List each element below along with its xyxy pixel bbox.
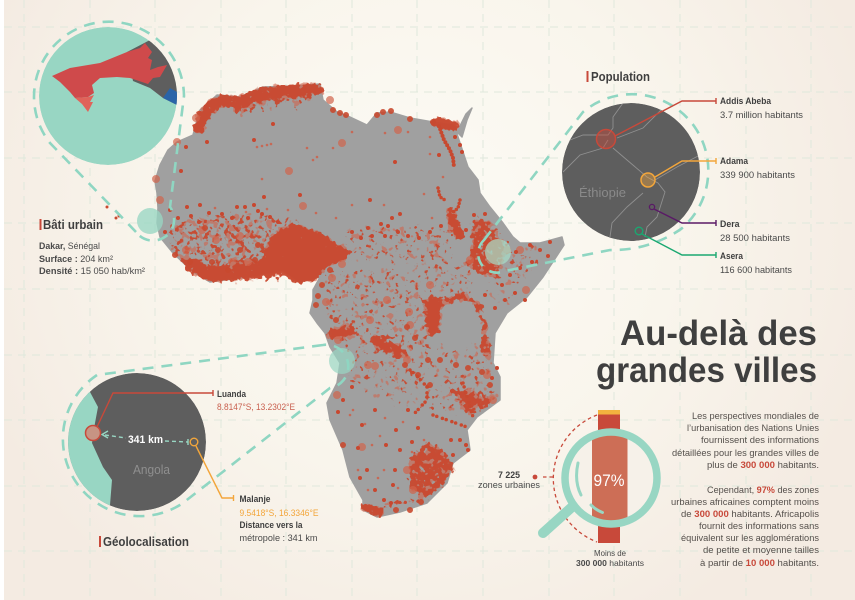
text block: description: fournit des informations sans	[699, 521, 819, 532]
text: Dakar facts	[39, 241, 145, 277]
medium dots	[165, 124, 550, 503]
distance arrow	[102, 431, 188, 446]
panel: Bâti urbain	[34, 22, 184, 277]
text: Dakar facts: Densité : 15 050 hab/km²	[39, 266, 145, 277]
pale urban dot field	[165, 89, 550, 513]
dashed callout ring	[478, 94, 708, 273]
map of Africa	[107, 84, 564, 517]
callout: Adama: Adama	[720, 156, 749, 167]
small dots	[215, 132, 443, 490]
label: 7 225 zones urbaines: 7 225	[498, 470, 521, 481]
callout: Malanje: Distance vers la	[240, 520, 303, 531]
magnifier handle	[543, 507, 572, 533]
panel: Population	[478, 69, 803, 276]
label: 7 225 zones urbaines	[478, 470, 540, 491]
magnifier lens interior	[570, 436, 652, 520]
callout: Dera: Dera	[720, 219, 740, 230]
title	[596, 314, 817, 390]
label: Éthiopie: Éthiopie	[579, 185, 626, 200]
text block: description: fournissent des informations	[701, 435, 819, 446]
dense urban dot field	[165, 89, 550, 513]
locator lens: Dakar	[137, 208, 163, 234]
dashed bracket: 7 225 zones	[541, 415, 597, 542]
text: Dakar facts: Surface : 204 km²	[39, 254, 113, 265]
heading: Population: Population	[591, 69, 650, 84]
label: moins de 300 000 habitants	[576, 548, 644, 568]
magnifier glints	[577, 463, 602, 512]
magnifier ring	[565, 432, 657, 524]
text block: description: Les perspectives mondiales de	[692, 411, 819, 422]
Angola inset map	[68, 373, 206, 511]
text block: description: l’urbanisation des Nations Unies	[687, 423, 819, 434]
chart: magnified 97% bar	[478, 410, 662, 568]
text block: description: de 300 000 habitants. Africapolis	[681, 509, 819, 520]
title: grandes villes	[596, 351, 817, 390]
callout: Luanda: 8.8147°S, 13.2302°E	[217, 402, 295, 413]
value: 97%: 97%	[594, 471, 624, 490]
dashed callout ring	[34, 22, 184, 241]
bracket end dot	[533, 475, 537, 479]
islands near Dakar	[107, 207, 119, 218]
callout: Asera: Asera	[720, 251, 744, 262]
label: moins de 300 000 habitants: 300 000 habitants	[576, 558, 644, 568]
text block: description: de petite et moyenne tailles	[703, 545, 819, 556]
callout: Addis Abeba: 3.7 million habitants	[720, 110, 803, 121]
text block: description: équivalent sur les agglomérations	[681, 533, 819, 544]
bead chains: Nile, Sudan, Zambia	[410, 126, 473, 427]
locator lens: Angola	[329, 348, 355, 374]
callout: Dera	[649, 204, 790, 244]
callout: Dera: 28 500 habitants	[720, 233, 790, 244]
callout: Asera: 116 600 habitants	[720, 265, 792, 276]
callout: Adama: 339 900 habitants	[720, 170, 795, 181]
text block: description	[671, 411, 819, 569]
bar	[598, 410, 620, 543]
label: Angola: Angola	[133, 462, 171, 477]
callout: Adama	[641, 156, 795, 187]
dashed callout ring	[63, 345, 348, 516]
callout: Asera	[635, 227, 792, 276]
label: 7 225 zones urbaines: zones urbaines	[478, 480, 540, 491]
title: Au-delà des	[620, 314, 817, 353]
callout: Addis Abeba	[596, 96, 803, 148]
Ethiopia inset map	[562, 103, 700, 241]
callout: Malanje	[190, 438, 318, 544]
text block: description: Cependant, 97% des zones	[707, 485, 819, 496]
text block: description: plus de 300 000 habitants.	[707, 460, 819, 471]
callout: Addis Abeba: Addis Abeba	[720, 96, 772, 107]
callout: Malanje: 9.5418°S, 16.3346°E	[240, 508, 318, 519]
large solid dots	[175, 110, 490, 510]
locator lens: Ethiopia	[485, 239, 511, 265]
text block: description: à partir de 10 000 habitants.	[700, 558, 819, 569]
heading: Bâti urbain: Bâti urbain	[43, 217, 103, 232]
heading: Géolocalisation: Géolocalisation	[103, 534, 189, 549]
callout: Luanda	[86, 389, 295, 440]
callout: Luanda: Luanda	[217, 389, 247, 400]
panel: Géolocalisation	[50, 345, 348, 549]
Dakar inset map	[39, 27, 184, 165]
bar top segment	[598, 410, 620, 414]
callout: Malanje: Malanje	[240, 494, 270, 505]
callout: Malanje: métropole : 341 km	[240, 533, 318, 544]
distance arrow: 341 km	[128, 434, 163, 446]
land silhouette	[155, 84, 564, 517]
text block: description: détaillées pour les grandes villes de	[672, 448, 819, 459]
label: moins de 300 000 habitants: Moins de	[594, 548, 626, 558]
text: Dakar facts: Dakar, Sénégal	[39, 241, 100, 252]
pale large dots	[156, 100, 526, 490]
text block: description: urbaines africaines comptent moins	[671, 497, 819, 508]
